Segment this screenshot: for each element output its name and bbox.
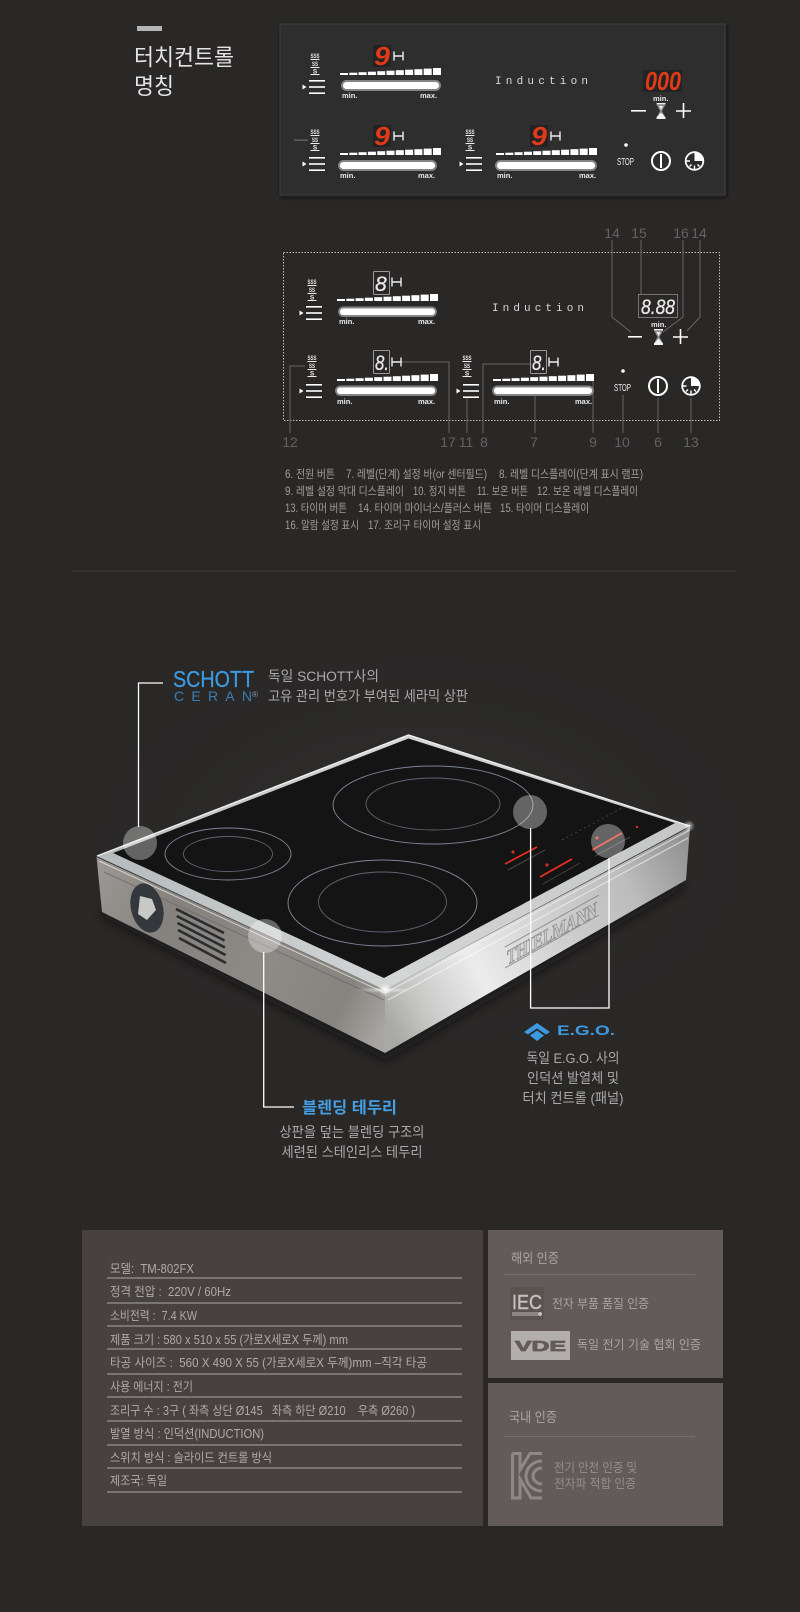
spec row: model: 모델: TM-802FX (110, 1262, 195, 1276)
heat symbol bottom left: S (310, 370, 315, 378)
heat symbol top left: SS (309, 287, 315, 294)
scale bottom left: min. (340, 171, 355, 180)
icon: VDE: VDE (515, 1338, 566, 1355)
power button (652, 152, 670, 170)
heat symbol top left: S (313, 68, 318, 76)
scale bottom middle (497, 171, 596, 180)
section marker dash (137, 26, 162, 31)
heat symbol top left (308, 279, 317, 302)
spec row: voltage: 정격 전압 : 220V / 60Hz (110, 1285, 231, 1299)
stop button: STOP (614, 383, 631, 394)
left steel face (96, 857, 385, 1053)
pointer dash (294, 140, 308, 141)
ramp display bottom left (340, 148, 441, 155)
spec row: size: 제품 크기 : 580 x 510 x 55 (가로X세로X 두께) mm (110, 1333, 348, 1347)
callout numbers top (604, 225, 707, 241)
level lamps bottom left (300, 384, 322, 398)
text: blending description (280, 1124, 424, 1160)
stop button: STOP (617, 157, 634, 168)
legend text: 17. 조리구 타이머 설정 표시 (368, 519, 481, 532)
legend text: 8. 레벨 디스플레이(단계 표시 램프) (499, 468, 643, 481)
heat symbol bottom middle: SSS (466, 129, 475, 136)
timer mark bottom left (392, 358, 401, 366)
scale bottom middle: min. (497, 171, 512, 180)
glass controls (505, 808, 638, 884)
leader lines (290, 240, 700, 433)
hotspot: induction (513, 795, 547, 829)
scale top left: max. (420, 91, 437, 100)
logo: schott ceran: ® (252, 690, 258, 699)
brand word: Induction (492, 303, 584, 315)
callout line: ego (531, 828, 609, 1008)
scale top left: min. (339, 317, 354, 326)
logo: ego: E.G.O. (557, 1022, 615, 1038)
timer mark bottom middle (549, 358, 558, 366)
legend text (285, 467, 643, 532)
heat symbol bottom left: S (313, 144, 318, 152)
scale bottom left (340, 171, 435, 180)
callout numbers bottom: 6 (654, 434, 662, 450)
heat symbol bottom middle: S (468, 144, 473, 152)
level lamps bottom middle (456, 384, 479, 398)
text: ego description: 독일 E.G.O. 사의 (526, 1050, 620, 1066)
side vent slots (176, 909, 226, 963)
VDE caption: 독일 전기 기술 협회 인증 (577, 1338, 701, 1352)
KC caption: 전기 안전 인증 및 (554, 1461, 637, 1475)
level digit bottom middle: 8. (532, 352, 546, 375)
spec row: origin: 제조국: 독일 (110, 1474, 167, 1488)
timer min label: min. (651, 320, 666, 329)
scale bottom left: max. (418, 171, 435, 180)
scale bottom middle: max. (575, 397, 592, 406)
dashed frame (284, 252, 720, 420)
domestic heading: 국내 인증 (509, 1410, 557, 1425)
text: schott description: 독일 SCHOTT사의 (268, 668, 379, 684)
title: 명칭 (134, 73, 174, 99)
legend text: 9. 레벨 설정 막대 디스플레이 (285, 485, 404, 498)
callout numbers bottom: 17 (440, 434, 456, 450)
logo: schott ceran (173, 666, 258, 704)
product: induction hob (96, 735, 695, 1060)
ramp bottom left (337, 374, 438, 381)
heat symbol bottom left: SSS (308, 355, 317, 362)
heat symbol bottom middle (462, 355, 472, 378)
red digit top left: 9 (374, 41, 391, 71)
specs background (82, 1230, 483, 1526)
timer digits: 000 (645, 66, 681, 96)
slider bottom left (339, 161, 436, 170)
level lamps top left (300, 306, 322, 320)
legend text: 15. 타이머 디스플레이 (500, 502, 589, 515)
timer button (682, 377, 700, 395)
IEC caption: 전자 부품 품질 인증 (552, 1297, 649, 1311)
heat symbol top left (310, 53, 320, 76)
product glow (40, 620, 800, 1080)
icon: VDE (511, 1331, 570, 1360)
spec row: heating: 발열 방식 : 인덕션(INDUCTION) (110, 1427, 264, 1441)
scale top left (342, 91, 437, 100)
hotspot: edge (248, 919, 282, 953)
KC caption: 전자파 적합 인증 (554, 1477, 636, 1491)
legend text: 7. 레벨(단계) 설정 바(or 센터필드) (346, 468, 487, 481)
overseas heading: 해외 인증 (511, 1251, 559, 1266)
level digit top left: 8 (375, 273, 387, 296)
heat symbol bottom middle: SS (467, 137, 473, 144)
level digit top left (374, 272, 390, 296)
callout numbers bottom: 9 (589, 434, 597, 450)
heat symbol bottom middle: S (465, 370, 470, 378)
level lamps bottom middle (460, 157, 482, 171)
slider bottom left (336, 386, 436, 395)
brand word: Induction (495, 76, 588, 88)
red digit bottom left: 9 (374, 121, 391, 151)
timer mark bottom middle (551, 132, 560, 140)
logo: ego (524, 1022, 615, 1041)
right steel face (385, 827, 690, 1053)
ramp top left (337, 294, 438, 301)
legend text: 11. 보온 버튼 (477, 485, 528, 498)
power button (649, 377, 667, 395)
spec row: power: 소비전력 : 7.4 KW (110, 1309, 197, 1323)
brand plate THIELMANN: THIELMANN (507, 897, 597, 970)
KC caption (554, 1461, 637, 1491)
domestic background (488, 1383, 723, 1526)
slider bottom middle (496, 161, 596, 170)
glass top (113, 738, 675, 978)
scale bottom middle (494, 397, 592, 406)
heat symbol bottom middle: SSS (462, 355, 472, 362)
scale top left (339, 317, 435, 326)
heat symbol bottom middle (466, 129, 475, 152)
timer mark bottom left (394, 132, 403, 140)
ramp bottom middle (493, 374, 594, 381)
slider top left (342, 81, 440, 90)
heat symbol bottom middle: SS (464, 363, 470, 370)
corner flares (355, 820, 695, 997)
slider top left (339, 308, 436, 316)
legend text: 12. 보온 레벨 디스플레이 (537, 485, 638, 498)
level lamps top left (302, 80, 325, 94)
callout numbers bottom: 12 (282, 434, 298, 450)
scale bottom middle: max. (579, 171, 596, 180)
callout numbers top: 15 (631, 225, 647, 241)
steel rim (96, 735, 690, 990)
icon: IEC (510, 1287, 544, 1320)
stop button (614, 369, 631, 394)
callout numbers bottom: 8 (480, 434, 488, 450)
legend text: 16. 알람 설정 표시 (285, 518, 359, 532)
callout numbers top: 14 (691, 225, 707, 241)
text: schott description: 고유 관리 번호가 부여된 세라믹 상판 (268, 688, 468, 704)
callout line: schott (138, 683, 163, 827)
burner left (165, 828, 291, 880)
legend text: 13. 타이머 버튼 (285, 502, 347, 515)
spec row: burners: 조리구 수 : 3구 ( 좌측 상단 Ø145 좌측 하단 Ø210 우측 Ø260 ) (110, 1404, 415, 1418)
timer plus (676, 103, 691, 118)
timer mark top left (392, 278, 401, 286)
logo: schott ceran: SCHOTT (173, 666, 254, 692)
callout line: blending edge (264, 952, 294, 1107)
heat symbol top left: SSS (310, 53, 320, 60)
text: blending description: 세련된 스테인리스 테두리 (282, 1144, 422, 1160)
timer min label: min. (653, 94, 668, 103)
heat symbol top left: SS (312, 61, 318, 68)
logo: schott ceran: CERAN (174, 688, 252, 704)
heat symbol bottom left (310, 129, 320, 152)
heat symbol bottom left: SS (312, 137, 318, 144)
burner top right (333, 766, 533, 844)
rim highlight lines (99, 830, 690, 993)
timer button (686, 152, 703, 170)
panel: overseas certification (488, 1230, 723, 1378)
hotspot: glass (123, 826, 157, 860)
text: ego description: 인덕션 발열체 및 (527, 1070, 619, 1086)
heat symbol top left: S (310, 294, 315, 302)
scale bottom middle: min. (494, 397, 509, 406)
hourglass (656, 103, 666, 119)
icon: KC (512, 1454, 542, 1498)
text: ego description: 터치 컨트롤 (패널) (522, 1090, 624, 1106)
level lamps bottom left (302, 157, 325, 171)
text: schott description (268, 668, 468, 704)
callout numbers bottom: 10 (614, 434, 630, 450)
ramp display top left (340, 68, 441, 75)
brand plate THIELMANN (505, 895, 599, 970)
timer plus (673, 329, 688, 344)
panel background (280, 24, 725, 195)
timer mark top left (394, 52, 403, 60)
callout numbers bottom: 11 (459, 434, 473, 450)
heat symbol bottom left: SSS (310, 129, 320, 136)
rim highlight top (97, 735, 690, 856)
scale bottom left: max. (418, 397, 435, 406)
callout numbers top: 16 (673, 225, 689, 241)
text: ego description (522, 1050, 624, 1106)
scale bottom left: min. (337, 397, 352, 406)
callout numbers bottom: 7 (530, 434, 538, 450)
timer display: 8.88 (641, 296, 675, 319)
heading: blending edge: 블렌딩 테두리 (302, 1099, 397, 1117)
stop button (617, 143, 634, 168)
spec row: energy: 사용 에너지 : 전기 (110, 1380, 193, 1394)
hotspot: panel (591, 824, 625, 858)
panel: annotated control diagram (282, 225, 720, 450)
icon: IEC: IEC (512, 1292, 542, 1314)
heat symbol bottom left (308, 355, 317, 378)
red digit bottom middle: 9 (531, 121, 548, 151)
hourglass (654, 329, 663, 345)
spec row: switch: 스위치 방식 : 슬라이드 컨트롤 방식 (110, 1451, 272, 1465)
timer minus (631, 110, 646, 112)
title (134, 44, 234, 99)
timer minus (628, 336, 642, 338)
side vent hole (125, 880, 169, 936)
heat symbol bottom left: SS (309, 363, 315, 370)
callout numbers top: 14 (604, 225, 620, 241)
scale top left: min. (342, 91, 357, 100)
panel: specifications (82, 1230, 483, 1526)
level digit bottom left: 8. (375, 352, 389, 375)
ramp display bottom middle (496, 148, 597, 155)
legend text: 6. 전원 버튼 (285, 467, 335, 481)
panel: domestic certification (488, 1383, 723, 1526)
panel: touch control photo (280, 24, 725, 195)
spec row: cutout: 타공 사이즈 : 560 X 490 X 55 (가로X세로X 두께)mm –직각 타공 (110, 1356, 427, 1370)
text: blending description: 상판을 덮는 블렌딩 구조의 (280, 1124, 424, 1140)
scale bottom left (337, 397, 435, 406)
shadow under hob (102, 875, 686, 1060)
scale top left: max. (418, 317, 435, 326)
slider bottom middle (493, 386, 593, 395)
heat symbol top left: SSS (308, 279, 317, 286)
callout numbers bottom: 13 (683, 434, 699, 450)
legend text: 10. 정지 버튼 (413, 485, 466, 498)
legend text: 14. 타이머 마이너스/플러스 버튼 (358, 502, 492, 515)
burner front (288, 860, 477, 946)
title: 터치컨트롤 (134, 44, 234, 70)
overseas background (488, 1230, 723, 1378)
callout numbers bottom (282, 434, 699, 450)
